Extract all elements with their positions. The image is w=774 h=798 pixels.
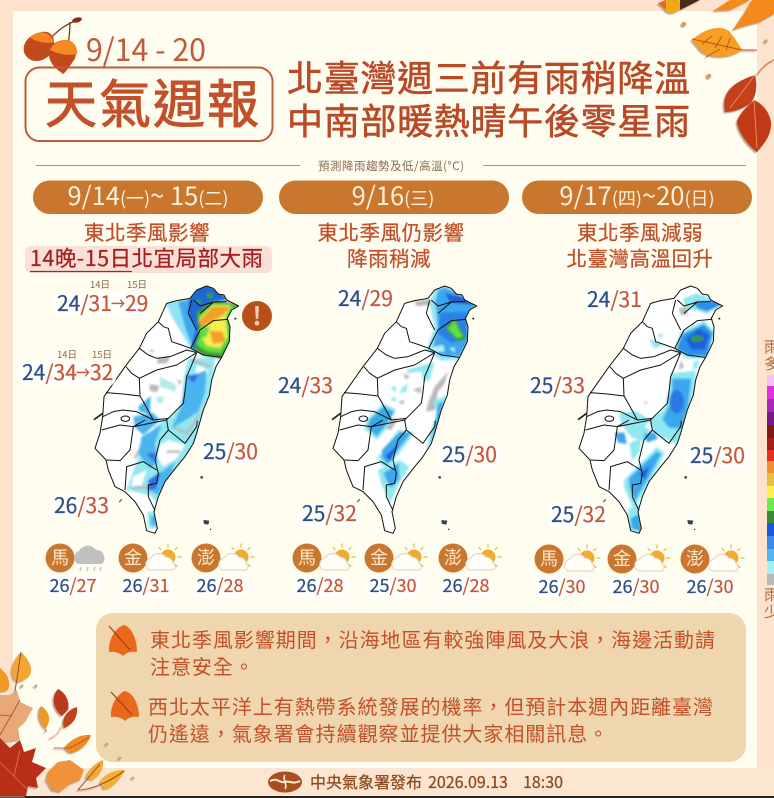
temps map 1: →	[111, 290, 125, 315]
date pill 2: 9/16(三)	[352, 176, 434, 213]
temps map 1: 25/30	[203, 436, 258, 466]
date range: 9/14 - 20	[86, 25, 206, 70]
temps map 1	[18, 277, 262, 520]
heading 3: 東北季風減弱	[577, 216, 703, 246]
footer credit: 中央氣象署發布	[310, 769, 422, 793]
date pill 3	[522, 176, 752, 214]
notice 1: 東北季風影響期間，沿海地區有較強陣風及大浪，海邊活動請	[150, 624, 716, 653]
heading 2	[318, 216, 464, 272]
outlying islands 2: 澎	[444, 544, 462, 570]
outlying islands 1	[46, 544, 254, 598]
temps map 2	[274, 283, 500, 528]
outlying islands 3: 金	[613, 545, 631, 571]
headline	[287, 50, 690, 145]
date pill 3: 9/17(四)~20(日)	[559, 176, 715, 213]
footer credit: 18:30	[523, 769, 563, 793]
icon: leaf 1	[109, 625, 137, 656]
notice 1	[150, 624, 716, 680]
outlying islands 2: 馬	[298, 544, 316, 570]
icon: cherries	[24, 16, 107, 74]
outlying islands 2: 26/28	[296, 572, 344, 598]
rainfall legend	[764, 336, 774, 622]
date pill 1	[33, 176, 263, 214]
outlying islands 2: 25/30	[369, 572, 417, 598]
temps map 2: 25/32	[302, 498, 357, 528]
temps map 1: 32	[90, 357, 113, 387]
decoration: top right leaves	[658, 0, 774, 152]
heading 3: 北臺灣高溫回升	[566, 242, 714, 272]
outlying islands 1: 26/27	[49, 572, 97, 598]
notice 2: 仍遙遠，氣象署會持續觀察並提供大家相關訊息。	[148, 718, 609, 747]
outlying islands 2: 金	[370, 544, 388, 570]
temps map 1: 15日	[127, 277, 147, 291]
temps map 1: →	[76, 359, 90, 384]
heading 1: 東北季風影響	[84, 216, 210, 246]
map 2	[332, 285, 477, 533]
outlying islands 3: 澎	[686, 545, 704, 571]
bottom edge	[0, 796, 774, 798]
temps map 1: 26/33	[54, 490, 109, 520]
temps map 1: 14日	[90, 277, 110, 291]
outlying islands 3: 馬	[540, 545, 558, 571]
heading 2: 降雨稍減	[347, 242, 431, 272]
panel: 9/14-15	[18, 176, 272, 598]
outlying islands 3: 26/30	[686, 573, 734, 599]
icon: warning	[242, 297, 272, 333]
headline: 北臺灣週三前有雨稍降溫	[287, 50, 690, 102]
outlying islands 1: 金	[124, 544, 142, 570]
footer band	[0, 768, 774, 796]
outlying islands 2: 26/28	[442, 572, 490, 598]
temps map 1: 29	[125, 288, 148, 318]
date pill 1: 9/14(一)~ 15(二)	[68, 176, 228, 213]
heading 2: 東北季風仍影響	[318, 216, 464, 246]
temps map 2: 24/33	[278, 370, 333, 400]
map 1	[94, 284, 241, 533]
heavy rain highlight: 14晚-15日北宜局部大雨	[30, 242, 263, 273]
notice 1: 注意安全。	[150, 651, 255, 680]
temps map 1: 24/31	[57, 288, 112, 318]
temps map 1: 24/34	[22, 357, 77, 387]
icon: warning: !	[252, 297, 262, 333]
outlying islands 1: 26/31	[122, 572, 170, 598]
footer credit: 2026.09.13	[428, 769, 508, 793]
date pill 2	[279, 176, 509, 214]
temps map 2: 25/30	[442, 439, 497, 469]
panel: notices	[96, 613, 746, 762]
temps map 3	[526, 284, 748, 529]
footer credit	[268, 769, 563, 793]
temps map 1: 14日	[57, 347, 77, 361]
temps map 1: 15日	[92, 347, 112, 361]
outlying islands 1: 馬	[51, 544, 69, 570]
temps map 3: 24/31	[587, 284, 642, 314]
panel: 9/17-20	[522, 176, 752, 599]
icon: agency logo	[268, 772, 302, 792]
temps map 2: 24/29	[338, 283, 393, 313]
headline: 中南部暖熱晴午後零星雨	[287, 93, 690, 145]
outlying islands 3: 26/30	[612, 573, 660, 599]
outlying islands 1: 26/28	[196, 572, 244, 598]
outlying islands 1: 澎	[197, 544, 215, 570]
outlying islands 3: 26/30	[538, 573, 586, 599]
panel: 9/16	[274, 176, 509, 598]
map 3	[578, 286, 723, 533]
temps map 3: 25/30	[690, 440, 745, 470]
notice 2	[148, 691, 714, 747]
notice 2: 西北太平洋上有熱帶系統發展的機率，但預計本週內距離臺灣	[148, 691, 714, 720]
decoration: bottom left leaves	[0, 652, 134, 796]
temps map 3: 25/33	[530, 370, 585, 400]
temps map 3: 25/32	[551, 499, 606, 529]
icon: leaf 2	[111, 691, 139, 721]
legend caption and rule: 預測降雨趨勢及低/高溫(°C)	[318, 158, 464, 174]
outlying islands 3	[534, 544, 744, 599]
outlying islands 2	[292, 544, 501, 598]
heading 3	[566, 216, 714, 272]
title box: 天氣週報	[45, 63, 259, 138]
